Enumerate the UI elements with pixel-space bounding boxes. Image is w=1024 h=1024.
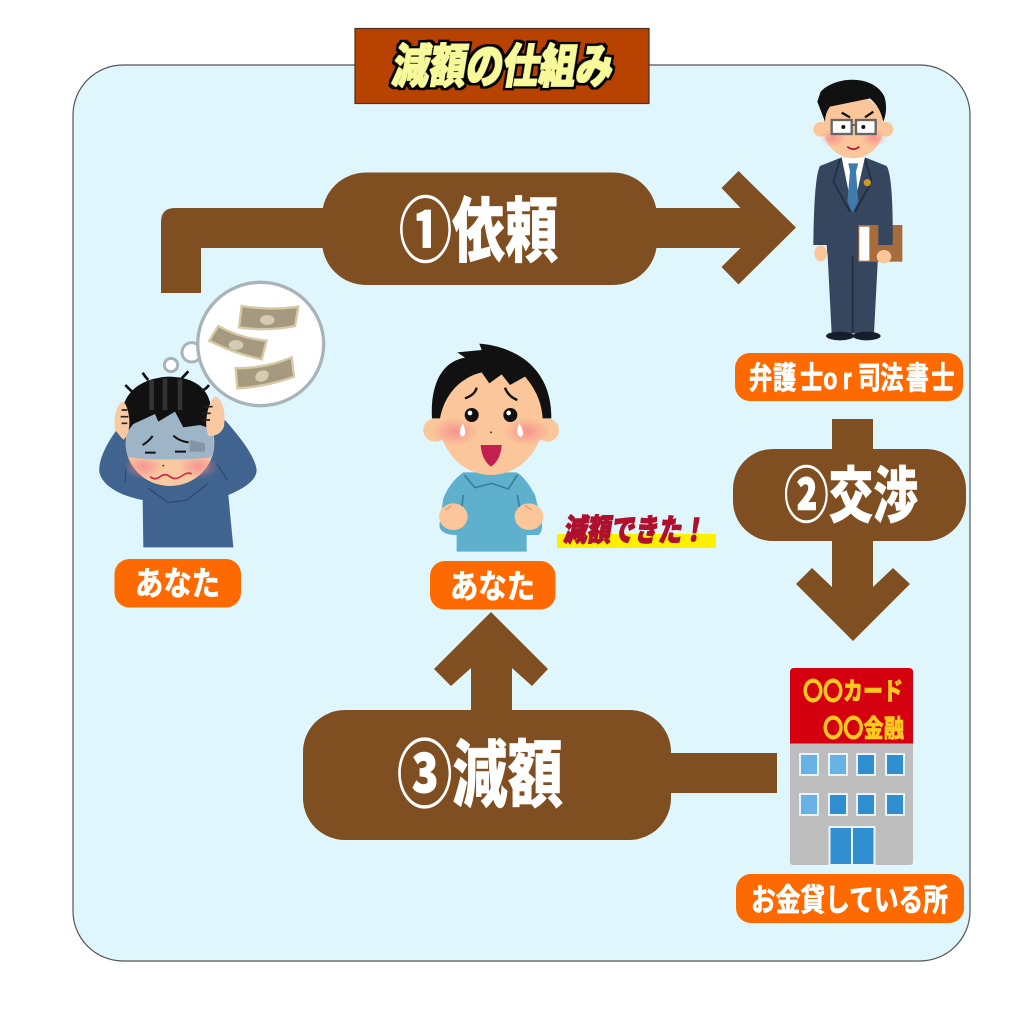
label: lender: お金貸している所 (751, 883, 948, 918)
step 3 label: ③減額 (397, 734, 563, 817)
label: lawyer or judicial scrivener: 弁護士or司法書士 (749, 361, 955, 396)
sign text: 〇〇カード (803, 678, 903, 706)
step 2 label: ②交渉 (784, 462, 918, 530)
step 1 label: ①依頼 (399, 193, 558, 272)
label: lawyer or judicial scrivener (735, 353, 963, 401)
icon: loan company building (790, 668, 913, 865)
label: you (worried) (114, 559, 241, 608)
icon: relieved person (423, 344, 559, 552)
icon: loan company building: 〇〇金融 (823, 715, 904, 743)
label: you (relieved): あなた (450, 568, 535, 605)
icon: worried person (99, 371, 257, 547)
title text: 減額の仕組み (389, 41, 618, 94)
icon: lawyer (813, 80, 902, 340)
windows (800, 754, 904, 865)
panel: background (73, 65, 970, 961)
arrow: step 2 negotiation (733, 419, 966, 641)
label: lender (736, 874, 964, 923)
label: you (worried): あなた (135, 565, 220, 602)
title banner (355, 28, 649, 104)
icon: thought bubble with money (164, 282, 324, 406)
arrow: step 3 reduction (303, 612, 777, 840)
callout: reduced: 減額できた！ (562, 513, 709, 548)
label: you (relieved) (430, 561, 556, 610)
arrow: step 1 request (161, 171, 796, 293)
